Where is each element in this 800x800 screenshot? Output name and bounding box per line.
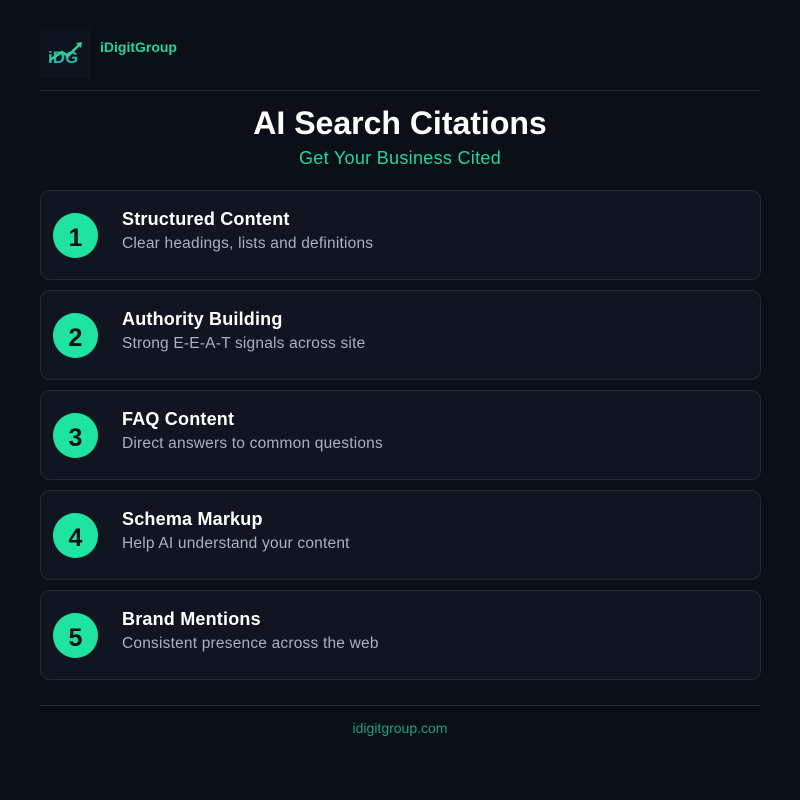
title: AI Search Citations [253, 105, 547, 141]
card 1: Structured Content [122, 209, 290, 229]
card 1: Clear headings, lists and definitions [122, 235, 373, 252]
logo [40, 28, 90, 78]
footer: idigitgroup.com [353, 720, 447, 736]
card 3: FAQ Content [122, 409, 234, 429]
card 2 [40, 290, 761, 380]
logo: iDG [48, 48, 78, 67]
card 5: Brand Mentions [122, 609, 261, 629]
card 1 [40, 190, 761, 280]
card 4 [40, 490, 761, 580]
subtitle: Get Your Business Cited [299, 148, 501, 168]
card 4: Help AI understand your content [122, 535, 350, 552]
card 5 [40, 590, 761, 680]
card 2: 2 [69, 324, 82, 352]
card 3 [40, 390, 761, 480]
card 4: Schema Markup [122, 509, 263, 529]
card 3: Direct answers to common questions [122, 435, 383, 452]
card 5: Consistent presence across the web [122, 635, 379, 652]
card 3: 3 [69, 424, 82, 452]
card 5: 5 [69, 624, 82, 652]
card 2: Strong E-E-A-T signals across site [122, 335, 365, 352]
brand name: iDigitGroup [100, 39, 177, 55]
card 4: 4 [69, 524, 82, 552]
card 2: Authority Building [122, 309, 283, 329]
card 1: 1 [69, 224, 82, 252]
